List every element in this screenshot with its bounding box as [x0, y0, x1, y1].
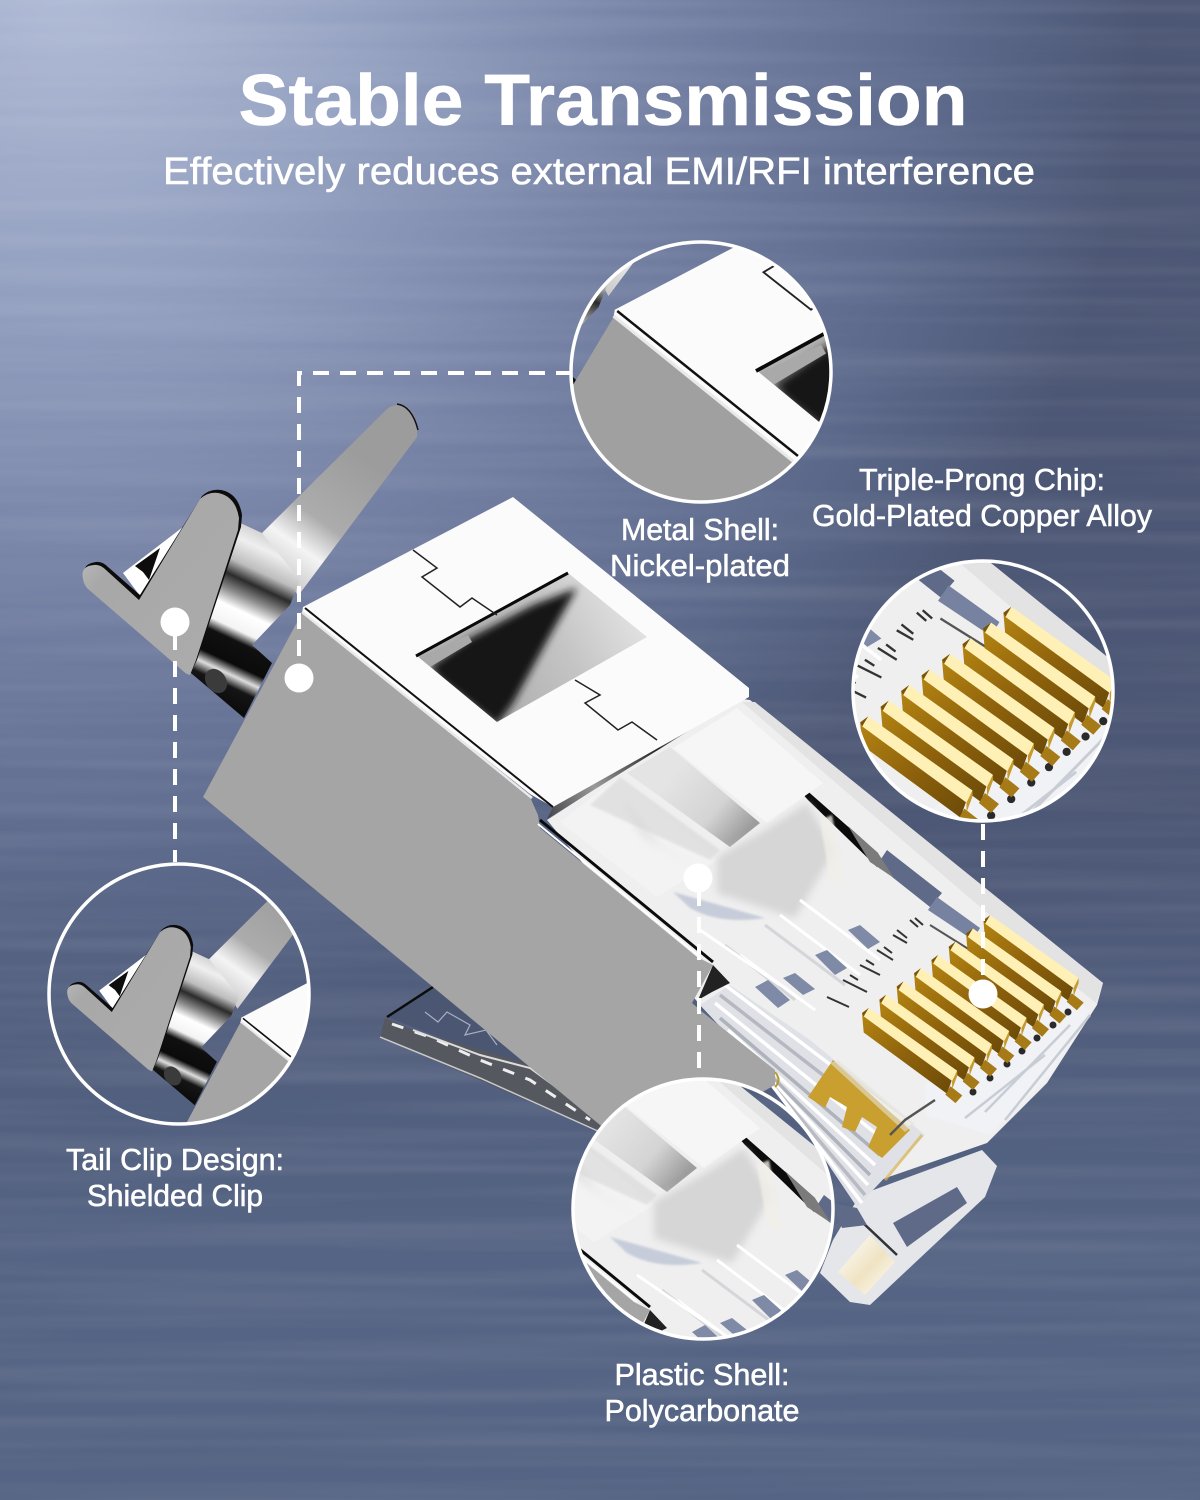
label: metal shell: Metal Shell:: [621, 512, 779, 547]
detail circle: plastic shell: [571, 1077, 835, 1341]
bottom latch: [380, 987, 606, 1132]
detail circle: metal shell: [569, 240, 833, 504]
label: plastic shell: [604, 1357, 800, 1428]
gold pins: [862, 915, 1084, 1103]
label: metal shell: Nickel-plated: [610, 548, 790, 583]
label: tail clip: [66, 1142, 284, 1213]
subtitle: Effectively reduces external EMI/RFI interference: [163, 151, 1035, 193]
label: plastic shell: Plastic Shell:: [614, 1357, 790, 1392]
tail clip: [82, 404, 418, 718]
label: metal shell: [610, 512, 790, 583]
metal shell top: [302, 497, 749, 807]
connector illustration: [82, 404, 1103, 1305]
metal shell side: [203, 613, 778, 1140]
detail circle: tail clip: [47, 862, 311, 1126]
label: triple-prong chip: Triple-Prong Chip:: [859, 462, 1105, 497]
plastic clear panels: [547, 694, 1103, 1015]
detail circle: gold pins: [851, 559, 1115, 823]
plastic ribs and plate: [700, 915, 1090, 1207]
plastic latch and body: [547, 698, 1103, 1305]
callout dots: [160, 608, 998, 1008]
callout: dashed leaders: [175, 373, 983, 1078]
label: triple-prong chip: Gold-Plated Copper Alloy: [812, 498, 1152, 533]
title: Stable Transmission: [238, 61, 968, 141]
label: triple-prong chip: [812, 462, 1152, 533]
label: plastic shell: Polycarbonate: [604, 1393, 800, 1428]
label: tail clip: Tail Clip Design:: [66, 1142, 284, 1177]
label: tail clip: Shielded Clip: [87, 1178, 263, 1213]
